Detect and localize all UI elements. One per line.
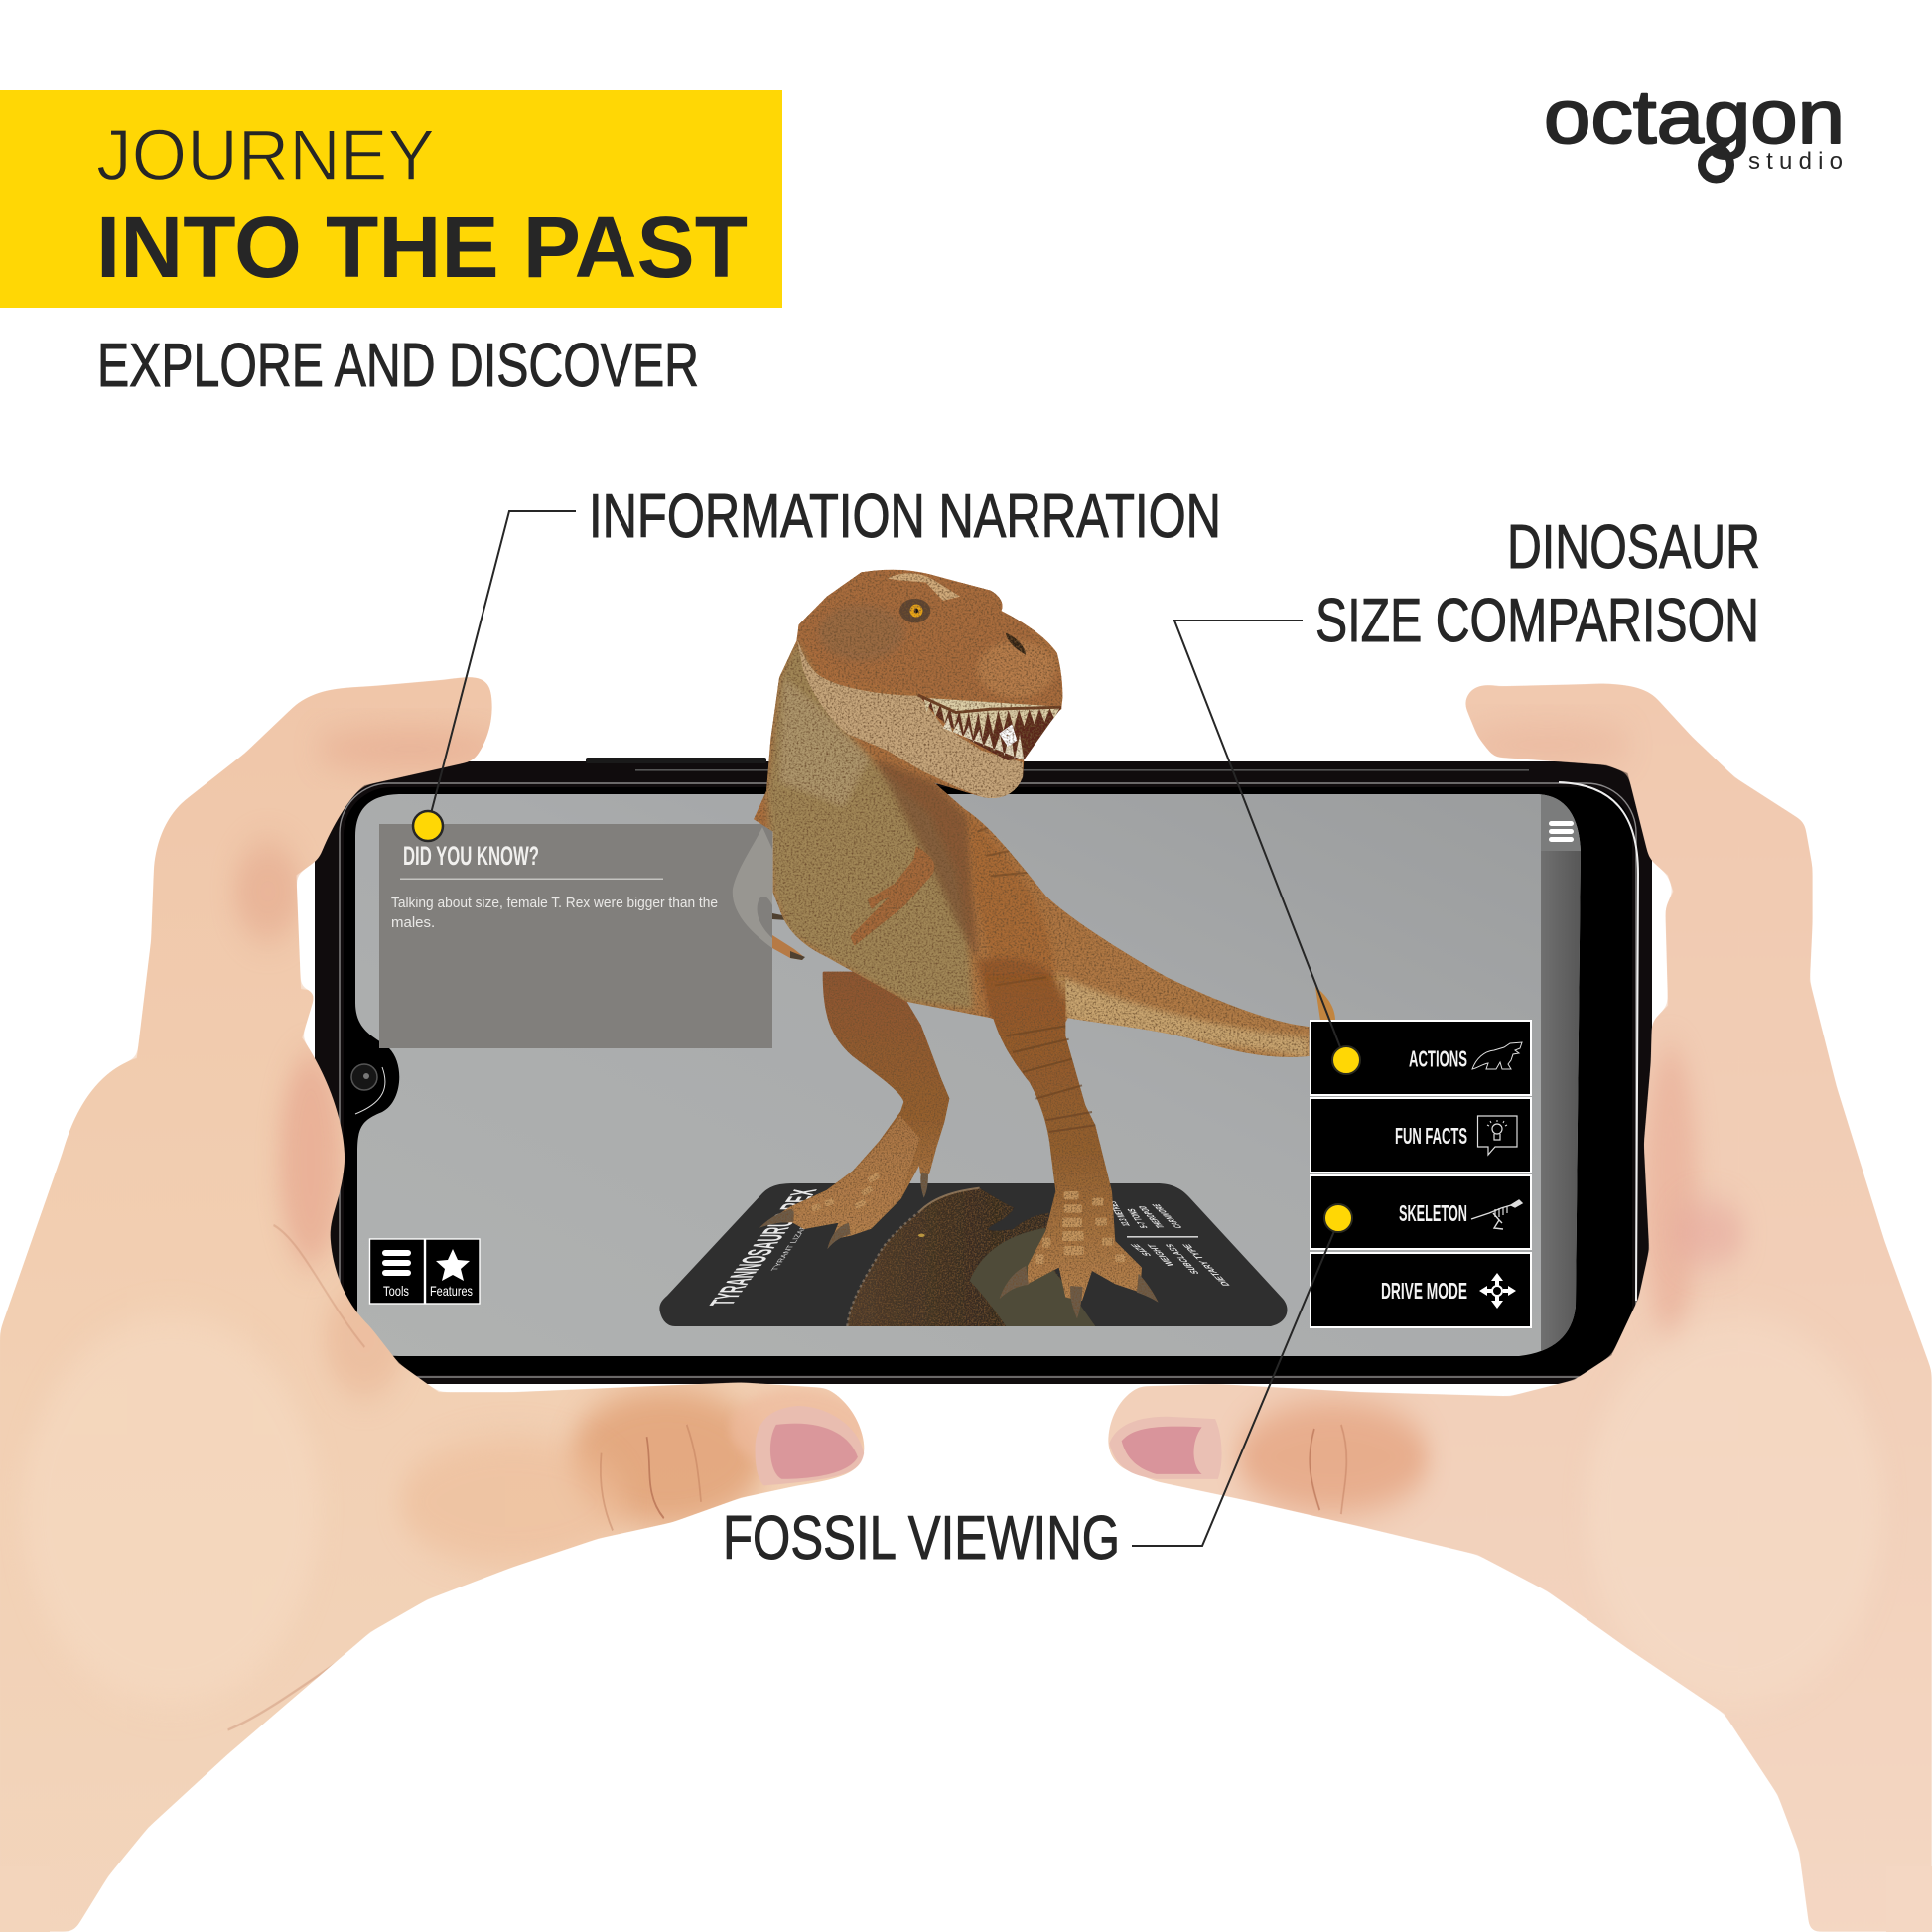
neck and chest: [766, 641, 973, 1010]
eye: [899, 599, 930, 622]
right hand: [1092, 655, 1932, 1932]
icon: skeleton: [1471, 1200, 1522, 1229]
back leg: [759, 973, 948, 1249]
menu item: skeleton: SKELETON: [1399, 1200, 1467, 1226]
body text: males.: [391, 914, 435, 931]
icon buttons: tools and features: [369, 1239, 480, 1304]
callout line: fossil viewing: [1132, 1231, 1334, 1546]
subtitle: EXPLORE AND DISCOVER: [97, 332, 699, 400]
thigh: [977, 957, 1068, 1022]
phone: [315, 758, 1652, 1384]
callout label: fossil viewing: FOSSIL VIEWING: [723, 1504, 1120, 1573]
logo: octagon studio: octagon: [1544, 75, 1845, 160]
side menu: [1311, 1021, 1531, 1327]
callout line: information narration: [428, 511, 576, 825]
phone body: [315, 761, 1652, 1384]
creases: [1309, 1424, 1348, 1515]
menu item: fun facts: [1311, 1098, 1531, 1173]
mat: facts labels: CARNIVORE: [1151, 1204, 1185, 1228]
icon: tools: [382, 1250, 411, 1276]
title banner: [0, 90, 782, 308]
text: TYRANNOSAURUS REX: [702, 1189, 824, 1306]
far arm over panel: [733, 827, 805, 960]
mat: facts labels: SIZE: [1129, 1244, 1155, 1256]
front leg: [985, 973, 1159, 1318]
power button: [586, 758, 766, 763]
dinosaur info mat: TYRANT LIZARD: [769, 1220, 813, 1271]
stripes: [977, 827, 1046, 987]
callout label: dinosaur size comparison: [1315, 513, 1760, 655]
mat: facts labels: [1107, 1201, 1233, 1286]
dinosaur info mat: [659, 1183, 1287, 1326]
thumbnail: right: [1109, 1417, 1222, 1479]
menu item: actions: [1311, 1021, 1531, 1095]
hamburger icon: side strip: [1549, 821, 1574, 842]
icon buttons: tools and features: Tools: [383, 1283, 409, 1299]
callout marker: information narration: [413, 811, 443, 841]
menu item: fun facts: FUN FACTS: [1395, 1123, 1467, 1149]
mat: facts labels: WEIGHT: [1146, 1244, 1177, 1266]
icon buttons: tools and features: Features: [430, 1283, 473, 1299]
mat: facts labels: DIETARY TYPE: [1180, 1244, 1233, 1286]
front camera: [351, 1064, 385, 1114]
heading: journey: JOURNEY: [96, 116, 435, 196]
screen: [347, 789, 1588, 1365]
heading: did you know: DID YOU KNOW?: [403, 841, 539, 871]
mat: facts labels: SUBCLASS: [1164, 1244, 1202, 1274]
callout marker: fossil viewing: [1324, 1204, 1352, 1232]
brow ridge: [887, 573, 960, 601]
mat: dinosaur portrait: [847, 1188, 1095, 1326]
thumbnail: left: [756, 1406, 864, 1485]
icon: t-rex outline: [1472, 1042, 1522, 1069]
creases: [228, 1225, 701, 1729]
flank: [971, 824, 1054, 969]
shading: [1644, 1046, 1698, 1339]
body, head and tail: [754, 570, 1309, 1057]
icon: lightbulb bubble: [1477, 1116, 1517, 1155]
body text: Talking about size, female T. Rex were bigger than the: [391, 895, 718, 911]
tail tip behind menu: [1315, 987, 1335, 1021]
lower teeth: [943, 717, 1024, 760]
dinosaur info mat: 12.3 METRES: [1107, 1201, 1133, 1226]
shadow under jaw: [874, 759, 978, 961]
mat: facts labels: THEROPOD: [1137, 1206, 1168, 1228]
upper lip: [918, 695, 1061, 712]
side strip: [1541, 851, 1583, 1362]
callout marker: size comparison: [1332, 1046, 1360, 1074]
callout line: size comparison: [1174, 621, 1342, 1052]
nostril: [1006, 633, 1026, 655]
tail underside: [1055, 973, 1310, 1058]
mouth: [919, 696, 1061, 760]
callout label: dinosaur size comparison: SIZE COMPARISON: [1315, 587, 1759, 655]
palm highlights: [43, 1328, 300, 1548]
left hand: [0, 655, 894, 1932]
dinosaur: [715, 556, 1317, 1318]
lower jaw and cheek: [796, 637, 1023, 798]
shading near phone: [279, 1054, 342, 1266]
icon: move arrows: [1479, 1273, 1516, 1309]
callout label: information narration: INFORMATION NARRATION: [589, 483, 1221, 551]
head shading: [798, 570, 1062, 685]
callout label: dinosaur size comparison: DINOSAUR: [1507, 513, 1760, 582]
menu item: drive mode: DRIVE MODE: [1381, 1278, 1467, 1304]
menu item: skeleton: [1311, 1175, 1531, 1249]
upper teeth: [923, 698, 1060, 739]
bezel highlight: [340, 783, 1636, 1377]
panel: did you know: [379, 824, 772, 1048]
logo: octagon studio: studio: [1748, 148, 1843, 175]
menu item: drive mode: [1311, 1253, 1531, 1327]
heading: into the past: INTO THE PAST: [96, 200, 748, 296]
thumb shading: [570, 1388, 763, 1526]
icon: star: [436, 1249, 470, 1281]
menu item: actions: ACTIONS: [1409, 1046, 1467, 1072]
near arm: [852, 848, 933, 944]
mat: facts labels: 5-7 TONS: [1126, 1208, 1151, 1228]
